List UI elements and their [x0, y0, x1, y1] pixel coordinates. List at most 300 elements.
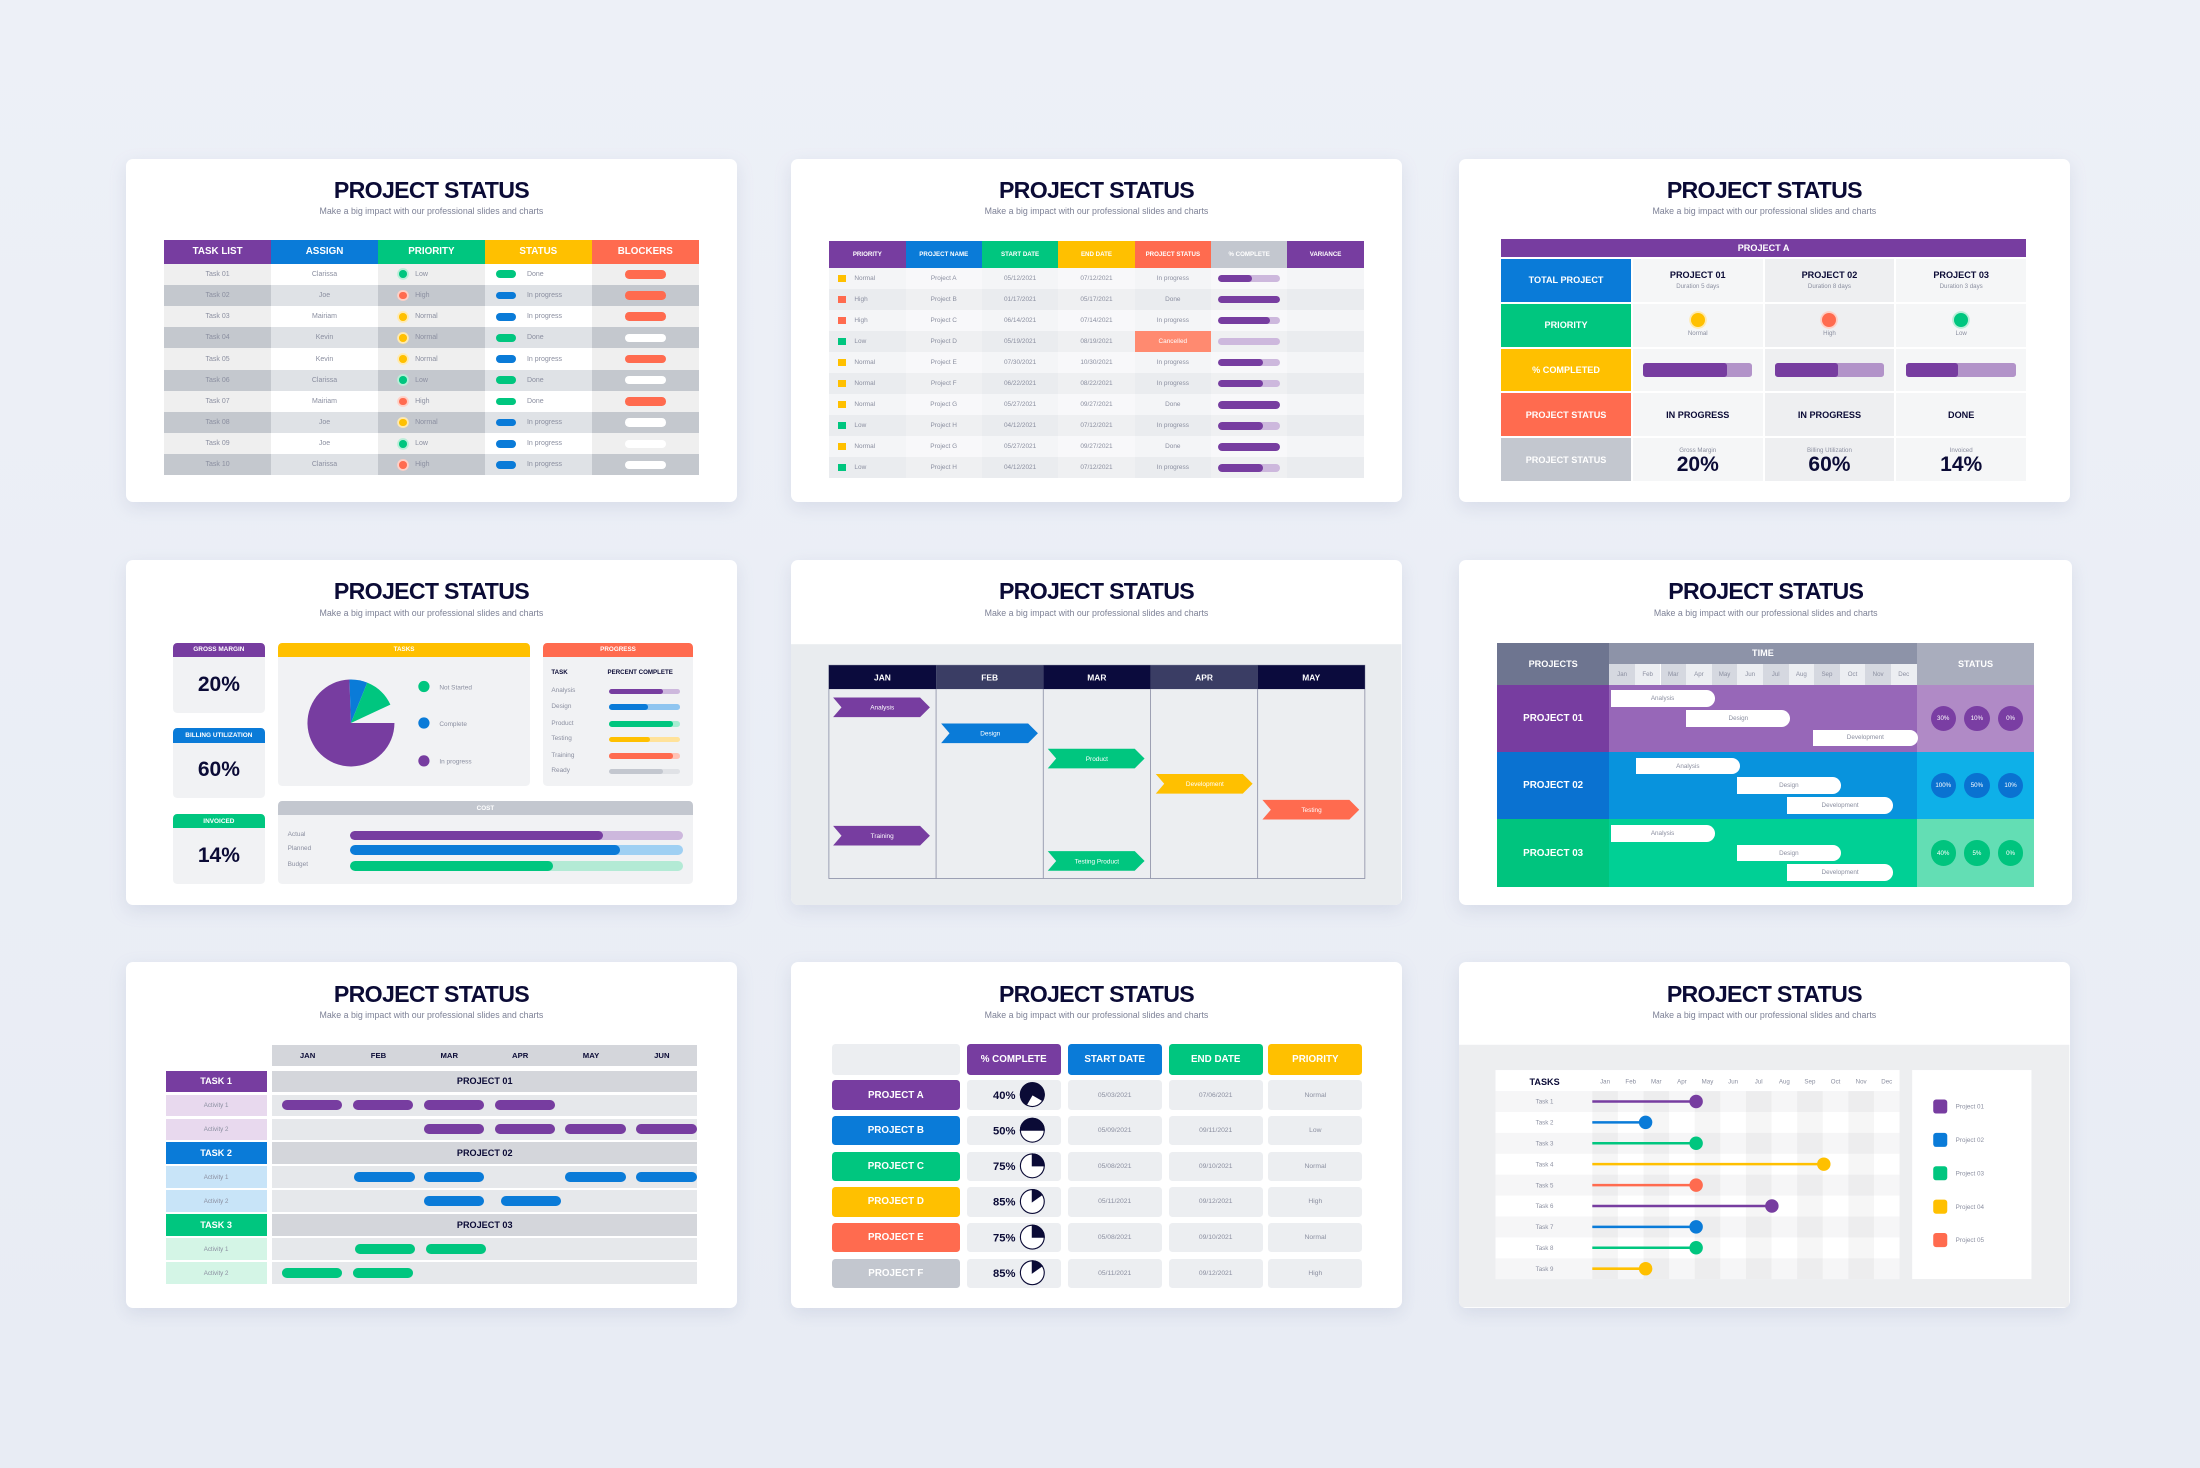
panel: task activity gantt card: Activity 1: [204, 1102, 228, 1109]
timeline chart: JAN: [874, 672, 891, 682]
panel: projects time/status card: 0%: [2006, 850, 2015, 857]
panel: task activity gantt card: [126, 962, 737, 1308]
table: task list: Mairiam: [312, 313, 337, 320]
pie chart: Complete: [439, 720, 467, 727]
panel: projects time/status card: [1459, 560, 2072, 905]
pie chart: [307, 680, 472, 766]
table: task list: In progress: [527, 419, 562, 426]
panel: task activity gantt card: Activity 1: [204, 1174, 228, 1181]
panel: progress bars: Design: [551, 703, 571, 710]
panel: project completion table card: PROJECT D: [868, 1196, 924, 1207]
matrix grid: IN PROGRESS: [1666, 410, 1729, 420]
panel: cost bars: Actual: [288, 831, 306, 838]
lollipop chart: Jun: [1728, 1079, 1739, 1086]
table: task list: Kevin: [316, 356, 333, 363]
lollipop chart: Task 2: [1536, 1120, 1554, 1127]
panel: projects time/status card: Jul: [1772, 671, 1780, 678]
table: projects: Project H: [930, 422, 957, 429]
arrow: analysis: [833, 697, 930, 717]
panel: projects time/status card: Analysis: [1651, 695, 1674, 702]
panel: project completion table card: 09/10/2021: [1199, 1163, 1233, 1170]
table: projects: [829, 241, 1364, 478]
table: projects: 07/30/2021: [1004, 359, 1036, 366]
subtitle: Make a big impact with our professional slides and charts: [1652, 1010, 1876, 1020]
lollipop chart: Mar: [1651, 1079, 1662, 1086]
panel: progress bars: PERCENT COMPLETE: [608, 669, 673, 676]
title: PROJECT STATUS: [1667, 981, 1862, 1007]
table: projects: Project F: [931, 380, 957, 387]
table: task list: Joe: [319, 419, 330, 426]
table: projects: 09/27/2021: [1080, 401, 1113, 408]
matrix grid: TOTAL PROJECT: [1529, 275, 1604, 285]
table: projects: In progress: [1157, 359, 1189, 366]
table: projects: In progress: [1157, 380, 1189, 387]
panel: project completion table card: 05/11/2021: [1098, 1270, 1131, 1277]
legend: Project 03: [1956, 1171, 1985, 1178]
table: projects: Project C: [930, 317, 957, 324]
table: task list: BLOCKERS: [618, 246, 673, 257]
panel: progress bars: PROGRESS: [600, 646, 636, 653]
arrow: training: Training: [871, 833, 894, 840]
table: task list: In progress: [527, 461, 562, 468]
kpi: billing utilization: [173, 728, 265, 798]
table: task list: Low: [415, 377, 428, 384]
panel: task activity gantt card: PROJECT 03: [457, 1220, 513, 1230]
panel: projects time/status card: May: [1719, 671, 1730, 678]
panel: projects time/status card: Sep: [1821, 671, 1832, 678]
table: projects: Done: [1165, 443, 1181, 450]
table: task list: Task 05: [206, 356, 230, 363]
table: projects: 04/12/2021: [1004, 422, 1036, 429]
panel: projects time/status card: Development: [1822, 802, 1859, 809]
table: projects: PROJECT STATUS: [1146, 251, 1200, 258]
timeline chart: APR: [1195, 672, 1213, 682]
lollipop chart: Task 6: [1536, 1204, 1554, 1211]
percent values and pie icons: 50%: [993, 1126, 1016, 1138]
arrow: product: [1048, 749, 1145, 768]
table: projects: 04/12/2021: [1004, 464, 1036, 471]
lollipop chart: Aug: [1779, 1079, 1791, 1086]
header bar: project A: PROJECT A: [1738, 243, 1790, 253]
panel: project completion table card: 07/06/2021: [1199, 1092, 1233, 1099]
lollipop chart: Task 7: [1536, 1225, 1554, 1232]
legend: Project 01: [1956, 1104, 1985, 1111]
panel: projects time/status card: Apr: [1694, 671, 1704, 678]
header bar: project A: [1501, 238, 2026, 257]
panel: projects time/status card: 10%: [1971, 715, 1983, 722]
month labels: [1609, 664, 1917, 685]
kpi: gross margin: 20%: [198, 673, 240, 696]
month header: APR: [512, 1051, 528, 1060]
panel: projects time/status card: Design: [1779, 850, 1799, 857]
panel: projects time/status card: Analysis: [1651, 830, 1674, 837]
panel: projects time/status card: Development: [1847, 734, 1884, 741]
panel: project completion table card: 09/12/2021: [1199, 1198, 1233, 1205]
kpi: gross margin: [173, 643, 265, 713]
table: task list: Done: [527, 398, 544, 405]
panel: cost bars: [278, 801, 693, 884]
panel: projects time/status card: PROJECT 03: [1523, 848, 1583, 859]
subtitle: Make a big impact with our professional slides and charts: [320, 1010, 543, 1020]
table: task list: [164, 240, 699, 475]
arrow: design: [941, 723, 1038, 743]
lollipop chart: Nov: [1856, 1079, 1868, 1086]
panel: projects time/status card: Design: [1779, 782, 1799, 789]
percent values and pie icons: 40%: [993, 1090, 1016, 1102]
pie chart: In progress: [439, 758, 471, 765]
timeline chart: [791, 644, 1402, 905]
table: task list: Kevin: [316, 334, 333, 341]
panel: task activity gantt card: TASK 3: [200, 1220, 232, 1230]
lollipop chart: Apr: [1677, 1079, 1687, 1086]
table: projects: 06/14/2021: [1004, 317, 1036, 324]
table: task list: TASK LIST: [193, 246, 243, 257]
table: task list: Joe: [319, 292, 330, 299]
panel: project completion table card: % COMPLETE: [981, 1054, 1047, 1065]
table: projects: Project D: [930, 338, 957, 345]
panel: project completion table card: Low: [1309, 1127, 1322, 1134]
matrix grid: % COMPLETED: [1532, 365, 1600, 375]
table: projects: 05/27/2021: [1004, 443, 1036, 450]
legend: [1912, 1071, 2032, 1280]
panel: projects time/status card: Design: [1729, 715, 1748, 722]
table: projects: Project A: [931, 275, 957, 282]
table: task list: In progress: [527, 356, 562, 363]
table: task list: Task 02: [206, 292, 230, 299]
panel: projects time/status card: Aug: [1796, 671, 1807, 678]
title: PROJECT STATUS: [1668, 578, 1863, 604]
panel: task activity gantt card: PROJECT 02: [457, 1148, 513, 1158]
table: task list: Done: [527, 334, 544, 341]
panel: project completion table card: 05/09/2021: [1098, 1127, 1132, 1134]
table: task list: STATUS: [519, 246, 557, 257]
matrix grid: DONE: [1948, 410, 1974, 420]
table: task list: High: [415, 292, 430, 299]
panel: projects time/status card: Jan: [1617, 671, 1627, 678]
table: task list: High: [415, 461, 430, 468]
header: time: [1609, 643, 1917, 664]
panel: project completion table card: PROJECT B: [868, 1125, 924, 1136]
arrow: development: Development: [1186, 781, 1224, 788]
table: task list: Task 06: [206, 377, 230, 384]
table: projects: 08/22/2021: [1080, 380, 1113, 387]
panel: progress bars: TASK: [551, 669, 568, 676]
table: projects: Done: [1165, 296, 1181, 303]
panel: project completion table card: PROJECT C: [868, 1161, 924, 1172]
arrow: training: [833, 826, 930, 845]
table: projects: Normal: [854, 443, 875, 450]
table: task list: In progress: [527, 440, 562, 447]
header: projects: [1497, 643, 1609, 685]
table: projects: In progress: [1157, 422, 1189, 429]
kpi: invoiced: [173, 814, 265, 884]
panel: projects time/status card: 40%: [1937, 850, 1949, 857]
panel: projects time/status card: 50%: [1971, 782, 1983, 789]
matrix grid: Low: [1956, 330, 1967, 337]
panel: task timeline dot chart card: [1459, 962, 2070, 1308]
timeline chart: MAY: [1303, 672, 1321, 682]
subtitle: Make a big impact with our professional slides and charts: [1652, 206, 1876, 216]
matrix grid: Billing Utilization: [1807, 447, 1852, 454]
matrix grid: 20%: [1677, 453, 1719, 476]
table: projects: 07/12/2021: [1080, 275, 1113, 282]
matrix grid: Normal: [1688, 330, 1708, 337]
lollipop chart: TASKS: [1530, 1077, 1560, 1087]
panel: task activity gantt card: Activity 1: [204, 1246, 228, 1253]
panel: project completion table card: 09/11/2021: [1199, 1127, 1232, 1134]
panel: task activity gantt card: PROJECT 01: [457, 1076, 513, 1086]
arrow: testing product: [1048, 851, 1145, 871]
header: status: [1917, 643, 2034, 685]
month header: JUN: [654, 1051, 670, 1060]
panel: project A matrix card: [1459, 159, 2070, 502]
table: projects: START DATE: [1001, 251, 1039, 258]
panel: dashboard card: [126, 560, 737, 905]
kpi: invoiced: INVOICED: [203, 818, 234, 825]
header: status: STATUS: [1958, 659, 1993, 669]
title: PROJECT STATUS: [334, 177, 529, 203]
panel: projects time/status card: 10%: [2004, 782, 2017, 789]
panel: projects time/status card: Dec: [1898, 671, 1909, 678]
panel: projects time/status card: Oct: [1848, 671, 1857, 678]
table: projects: 08/19/2021: [1080, 338, 1113, 345]
month header: JAN: [300, 1051, 315, 1060]
table: task list: Task 07: [206, 398, 230, 405]
matrix grid: Duration 3 days: [1940, 283, 1983, 290]
table: task list: In progress: [527, 313, 562, 320]
panel: projects time/status card: Analysis: [1676, 763, 1700, 770]
matrix grid: PRIORITY: [1545, 320, 1588, 330]
lollipop chart: May: [1702, 1079, 1714, 1086]
lollipop chart: Jul: [1755, 1079, 1763, 1086]
table: projects: 06/22/2021: [1004, 380, 1036, 387]
legend: Project 05: [1956, 1238, 1985, 1245]
table: projects: 05/17/2021: [1080, 296, 1113, 303]
title: PROJECT STATUS: [1667, 177, 1862, 203]
panel: project completion table card: START DATE: [1084, 1054, 1145, 1065]
matrix grid: PROJECT STATUS: [1526, 410, 1606, 420]
table: task list: PRIORITY: [408, 246, 455, 257]
panel: task activity gantt card: Activity 2: [204, 1126, 228, 1133]
subtitle: Make a big impact with our professional slides and charts: [320, 608, 543, 618]
matrix grid: Duration 8 days: [1808, 283, 1851, 290]
legend: Project 02: [1956, 1137, 1985, 1144]
gantt bars: [282, 1100, 697, 1278]
table: projects: 07/12/2021: [1080, 422, 1113, 429]
table: projects: Low: [854, 464, 866, 471]
subtitle: Make a big impact with our professional slides and charts: [320, 206, 543, 216]
matrix grid: PROJECT 01: [1670, 270, 1726, 280]
arrow: testing product: Testing Product: [1075, 858, 1120, 865]
subtitle: Make a big impact with our professional slides and charts: [1654, 608, 1878, 618]
panel: progress bars: Testing: [551, 735, 572, 742]
percent values and pie icons: 75%: [993, 1233, 1016, 1245]
matrix grid: IN PROGRESS: [1798, 410, 1861, 420]
panel: project completion table card: END DATE: [1191, 1054, 1240, 1065]
kpi: billing utilization: 60%: [198, 758, 240, 781]
panel: projects time/status card: PROJECT 02: [1523, 780, 1583, 791]
panel: cost bars: Budget: [288, 861, 308, 868]
lollipop chart: Sep: [1805, 1079, 1816, 1086]
title: PROJECT STATUS: [999, 578, 1194, 604]
table: projects: 07/12/2021: [1080, 464, 1113, 471]
header: time: TIME: [1752, 648, 1774, 658]
table headers: [832, 1044, 1362, 1075]
panel: progress bars: [543, 643, 693, 786]
table: projects: Cancelled: [1158, 338, 1187, 345]
lollipop chart: Feb: [1626, 1079, 1637, 1086]
table: task list: Mairiam: [312, 398, 337, 405]
panel: task activity gantt card: TASK 1: [200, 1076, 232, 1086]
panel: project completion table card: Normal: [1305, 1163, 1326, 1170]
table: projects: Normal: [854, 275, 875, 282]
table: projects: PROJECT NAME: [919, 251, 968, 258]
row: project 01: [1497, 685, 2034, 752]
panel: tasks pie: TASKS: [394, 646, 414, 653]
row: project 03: [1497, 819, 2034, 887]
panel: cost bars: Planned: [288, 845, 311, 852]
percent values and pie icons: 85%: [993, 1268, 1016, 1280]
panel: projects time/status card: Nov: [1873, 671, 1884, 678]
table: projects: 09/27/2021: [1080, 443, 1113, 450]
lollipop chart: Dec: [1881, 1079, 1892, 1086]
header: projects: PROJECTS: [1529, 659, 1578, 669]
timeline chart: MAR: [1088, 672, 1107, 682]
lollipop chart: Task 9: [1536, 1266, 1554, 1273]
matrix grid: PROJECT STATUS: [1526, 455, 1606, 465]
panel: project completion table card: 05/11/2021: [1098, 1198, 1131, 1205]
table: task list: Low: [415, 440, 428, 447]
subtitle: Make a big impact with our professional slides and charts: [985, 1010, 1208, 1020]
table: projects: Normal: [854, 401, 875, 408]
panel: project completion table card: Normal: [1305, 1234, 1326, 1241]
table: projects: END DATE: [1081, 251, 1112, 258]
lollipop chart: Jan: [1600, 1079, 1611, 1086]
panel: project completion table card: Normal: [1305, 1092, 1326, 1099]
title: PROJECT STATUS: [999, 177, 1194, 203]
table: projects: Low: [854, 422, 866, 429]
table: projects: Project E: [931, 359, 957, 366]
lollipop chart: Task 4: [1536, 1162, 1554, 1169]
panel: project completion table card: High: [1308, 1270, 1322, 1277]
arrow: design: Design: [981, 730, 1001, 737]
title: PROJECT STATUS: [334, 981, 529, 1007]
title: PROJECT STATUS: [334, 578, 529, 604]
table: task list: Task 03: [206, 313, 230, 320]
table: projects: Project B: [931, 296, 957, 303]
month header: [272, 1045, 697, 1066]
table: projects: 10/30/2021: [1080, 359, 1113, 366]
table: task list: Normal: [415, 313, 438, 320]
arrow: analysis: Analysis: [871, 705, 895, 712]
panel: projects time/status card: PROJECT 01: [1523, 713, 1583, 724]
subtitle: Make a big impact with our professional slides and charts: [985, 608, 1208, 618]
table: projects: Project G: [930, 401, 957, 408]
table: task list: Task 09: [206, 440, 230, 447]
arrow: development: [1156, 774, 1253, 793]
panel: project completion table card: 09/10/2021: [1199, 1234, 1233, 1241]
row: project 02: [1497, 752, 2034, 819]
arrow: testing: Testing: [1302, 807, 1322, 814]
subtitle: Make a big impact with our professional slides and charts: [985, 206, 1208, 216]
panel: project completion table card: PRIORITY: [1292, 1054, 1339, 1065]
panel: projects time/status card: Jun: [1745, 671, 1755, 678]
table: projects: High: [854, 317, 868, 324]
table: projects: Low: [854, 338, 866, 345]
panel: project completion table card: High: [1308, 1198, 1322, 1205]
table: task list: Normal: [415, 356, 438, 363]
table: projects: Project H: [930, 464, 957, 471]
panel: progress bars: Training: [551, 752, 574, 759]
title: PROJECT STATUS: [999, 981, 1194, 1007]
table: task list: Clarissa: [312, 377, 337, 384]
percent values and pie icons: 85%: [993, 1197, 1016, 1209]
arrow: product: Product: [1086, 756, 1108, 763]
panel: task activity gantt card: Activity 2: [204, 1198, 228, 1205]
panel: cost bars: COST: [477, 805, 494, 812]
lollipop chart: Oct: [1831, 1079, 1841, 1086]
table: projects: 05/27/2021: [1004, 401, 1036, 408]
panel: project completion table card: PROJECT E: [868, 1232, 924, 1243]
panel: projects time/status card: 100%: [1935, 782, 1951, 789]
table: projects: Done: [1165, 401, 1181, 408]
panel: projects time/status card: 0%: [2006, 715, 2015, 722]
panel: progress bars: Product: [551, 720, 574, 727]
arrow: testing: [1263, 800, 1360, 819]
matrix grid: PROJECT 02: [1802, 270, 1857, 280]
matrix grid: [1501, 259, 2026, 481]
month header: MAY: [583, 1051, 599, 1060]
table: projects: In progress: [1157, 275, 1189, 282]
table: task list: Clarissa: [312, 271, 337, 278]
panel: project completion table card: 05/08/2021: [1098, 1234, 1132, 1241]
panel: task activity gantt card: TASK 2: [200, 1148, 232, 1158]
matrix grid: Gross Margin: [1679, 447, 1716, 454]
matrix grid: 60%: [1808, 453, 1850, 476]
matrix grid: High: [1823, 330, 1836, 337]
table: projects: 05/12/2021: [1004, 275, 1036, 282]
matrix grid: Duration 5 days: [1676, 283, 1719, 290]
table: task list: Clarissa: [312, 461, 337, 468]
table: projects: High: [854, 296, 868, 303]
table: task list: Task 04: [206, 334, 230, 341]
kpi: invoiced: 14%: [198, 844, 240, 867]
table: projects: In progress: [1157, 317, 1189, 324]
panel: projects time/status card: Mar: [1668, 671, 1679, 678]
kpi: billing utilization: BILLING UTILIZATION: [185, 732, 252, 739]
lollipop chart: Task 1: [1536, 1099, 1554, 1106]
timeline chart: FEB: [982, 672, 998, 682]
table: task list: Joe: [319, 440, 330, 447]
matrix grid: 14%: [1940, 453, 1982, 476]
table: task list: Normal: [415, 334, 438, 341]
panel: project completion table card: 09/12/2021: [1199, 1270, 1233, 1277]
table rows: [832, 1080, 1362, 1288]
matrix grid: Invoiced: [1950, 447, 1973, 454]
table: task list: Task 08: [206, 419, 230, 426]
panel: projects time/status card: Feb: [1642, 671, 1653, 678]
panel: projects time/status card: 30%: [1937, 715, 1949, 722]
table: task list: Normal: [415, 419, 438, 426]
table: task list: Done: [527, 271, 544, 278]
table: projects: Normal: [854, 380, 875, 387]
table: task list: Task 01: [206, 271, 230, 278]
panel: monthly arrow timeline card: [791, 560, 1402, 905]
table: projects: % COMPLETE: [1228, 251, 1270, 258]
panel: task list table card: [126, 159, 737, 502]
table: projects: 01/17/2021: [1004, 296, 1036, 303]
panel: tasks pie: [278, 643, 530, 786]
